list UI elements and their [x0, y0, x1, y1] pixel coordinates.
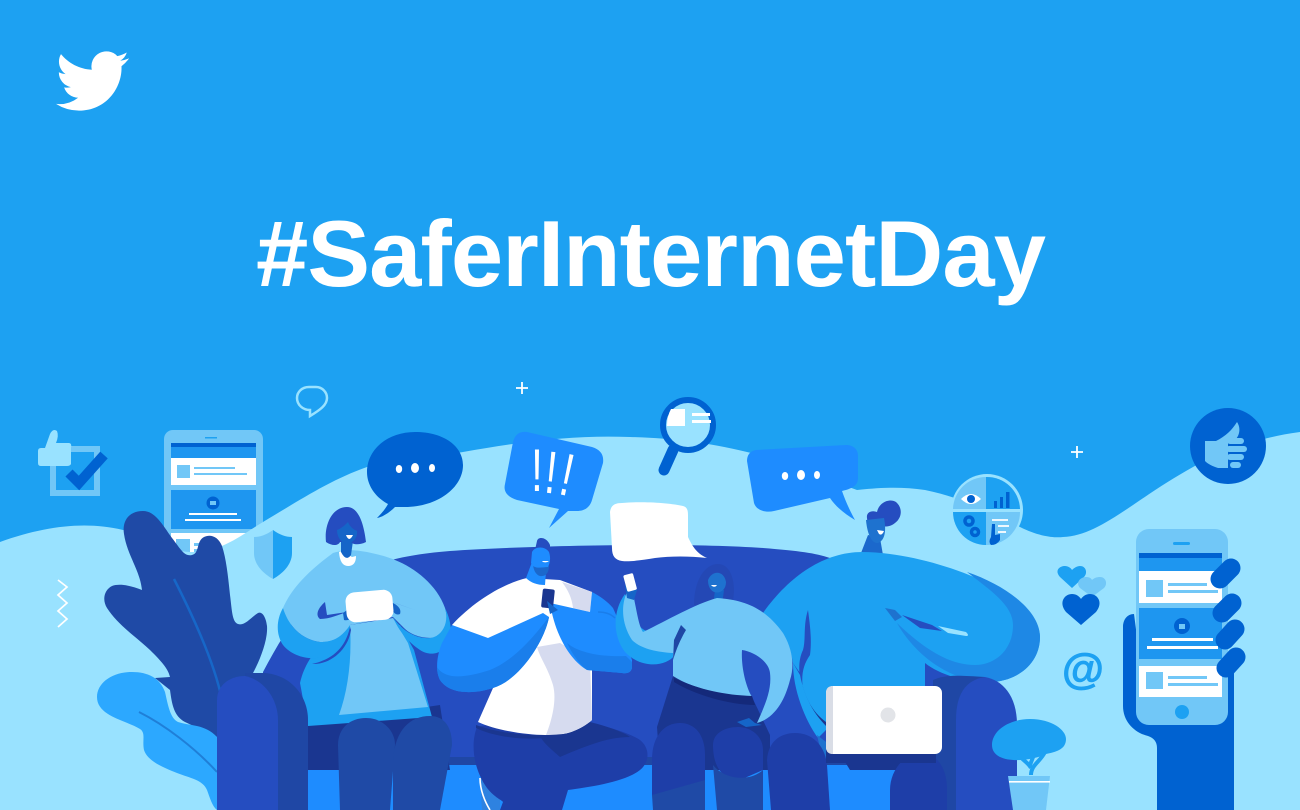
shirt shadow upper	[562, 582, 592, 612]
face	[531, 548, 550, 568]
hair	[326, 507, 366, 545]
beard	[533, 563, 549, 576]
hand at knee	[817, 735, 832, 760]
icon: circle dashboard	[951, 474, 1023, 546]
neck	[341, 541, 353, 558]
legs: woman with tablet	[338, 716, 452, 810]
right arm shade	[567, 643, 632, 673]
icon: zigzag	[58, 580, 67, 627]
left sleeve shadow	[312, 627, 351, 664]
waist shade	[674, 678, 755, 705]
hand back and arm	[1123, 614, 1234, 810]
shoulders	[283, 550, 447, 642]
arm shadow	[902, 615, 942, 631]
phone	[541, 588, 555, 609]
shirt shadow lower	[537, 643, 592, 735]
face	[708, 573, 726, 593]
laptop base shadow	[826, 750, 936, 763]
person: man with phone	[437, 538, 648, 810]
sweater	[623, 590, 792, 723]
hand at hip	[737, 718, 762, 727]
left arm shade	[437, 617, 549, 692]
card three	[1139, 666, 1222, 697]
icon: shield	[254, 530, 292, 579]
hair	[867, 500, 901, 528]
raised hand	[885, 608, 902, 621]
sofa seat front	[300, 765, 970, 810]
icon: twitter bird logo	[56, 51, 129, 111]
lower arm left	[793, 663, 828, 738]
neck	[713, 590, 724, 608]
thigh behind	[810, 685, 925, 770]
icon: hearts	[1057, 566, 1106, 625]
background hills	[0, 432, 1300, 810]
card two	[1139, 608, 1222, 659]
sofa back	[263, 545, 1000, 770]
right sleeve	[393, 608, 451, 654]
speech bubble: exclamations: !	[531, 437, 543, 504]
pants	[657, 676, 770, 770]
plant: light leaf	[97, 672, 217, 810]
collar	[339, 551, 356, 566]
speech bubble: white	[610, 502, 707, 561]
speech bubble: dots right	[747, 445, 858, 520]
speech bubble: exclamations: !	[542, 438, 560, 506]
hand	[625, 585, 637, 600]
torso side	[300, 625, 432, 726]
left arm	[437, 613, 549, 692]
icon: plus sign left	[516, 382, 528, 394]
title: #SaferInternetDay	[256, 201, 1046, 306]
plant: large dark leaf	[104, 511, 267, 737]
right arm	[550, 592, 632, 673]
torso fold	[799, 610, 811, 690]
sofa left armrest	[217, 673, 308, 810]
pants	[474, 720, 648, 810]
card one	[1139, 571, 1222, 603]
shoe stripe	[480, 778, 490, 810]
person: woman with tablet	[278, 507, 451, 770]
home button	[1175, 705, 1189, 719]
hair	[535, 538, 550, 552]
icon: magnifier	[663, 400, 713, 470]
sofa seat edge	[300, 757, 970, 765]
hair	[694, 564, 734, 610]
icon: small speech bubble outline	[297, 387, 327, 416]
hands	[343, 604, 356, 620]
icon: plus sign right	[1071, 446, 1083, 458]
icon: tablet behind hill	[164, 430, 263, 565]
icon: thumbs up circle	[1190, 408, 1266, 484]
fingers	[1220, 568, 1236, 668]
icon: small bonsai plant	[992, 719, 1066, 810]
forearm shadows	[318, 602, 347, 619]
icon: thumbs up with checkbox	[38, 430, 104, 493]
person: man with laptop	[763, 500, 1040, 770]
smile	[877, 530, 884, 535]
pants shadow	[540, 722, 630, 757]
hand	[547, 601, 558, 614]
left sleeve	[278, 608, 350, 658]
phone card	[623, 573, 637, 592]
phone speaker	[1173, 542, 1190, 545]
laptop	[826, 686, 942, 754]
smile	[711, 585, 717, 587]
icon: hand holding phone	[1123, 529, 1236, 810]
face	[866, 518, 885, 543]
sofa right armrest	[933, 676, 1017, 810]
arm shade	[897, 572, 1040, 682]
neck	[861, 535, 883, 557]
pants and lap	[305, 705, 450, 770]
shirt hem	[476, 725, 570, 739]
legs: woman with phone	[652, 723, 830, 810]
arm highlight	[938, 626, 968, 636]
smile	[346, 535, 353, 539]
shoe	[480, 778, 500, 810]
face	[337, 522, 357, 543]
speech bubble: dots navy	[367, 432, 463, 518]
legs: man with laptop	[890, 753, 947, 810]
person: woman with phone raised	[616, 564, 792, 770]
sleeve fold	[673, 625, 686, 660]
tablet device	[345, 589, 394, 623]
screen top	[1139, 553, 1222, 571]
torso front	[339, 618, 428, 715]
right arm fold	[598, 612, 615, 618]
phone body	[1136, 529, 1228, 725]
shirt	[452, 578, 592, 735]
speech bubble: exclamations: !	[555, 441, 580, 509]
smile	[542, 561, 549, 562]
icon: at sign: @	[1062, 645, 1104, 693]
raised arm sleeve shade	[616, 594, 675, 664]
speech bubble: exclamations	[505, 432, 603, 528]
body	[763, 552, 1040, 722]
neck	[526, 562, 546, 585]
